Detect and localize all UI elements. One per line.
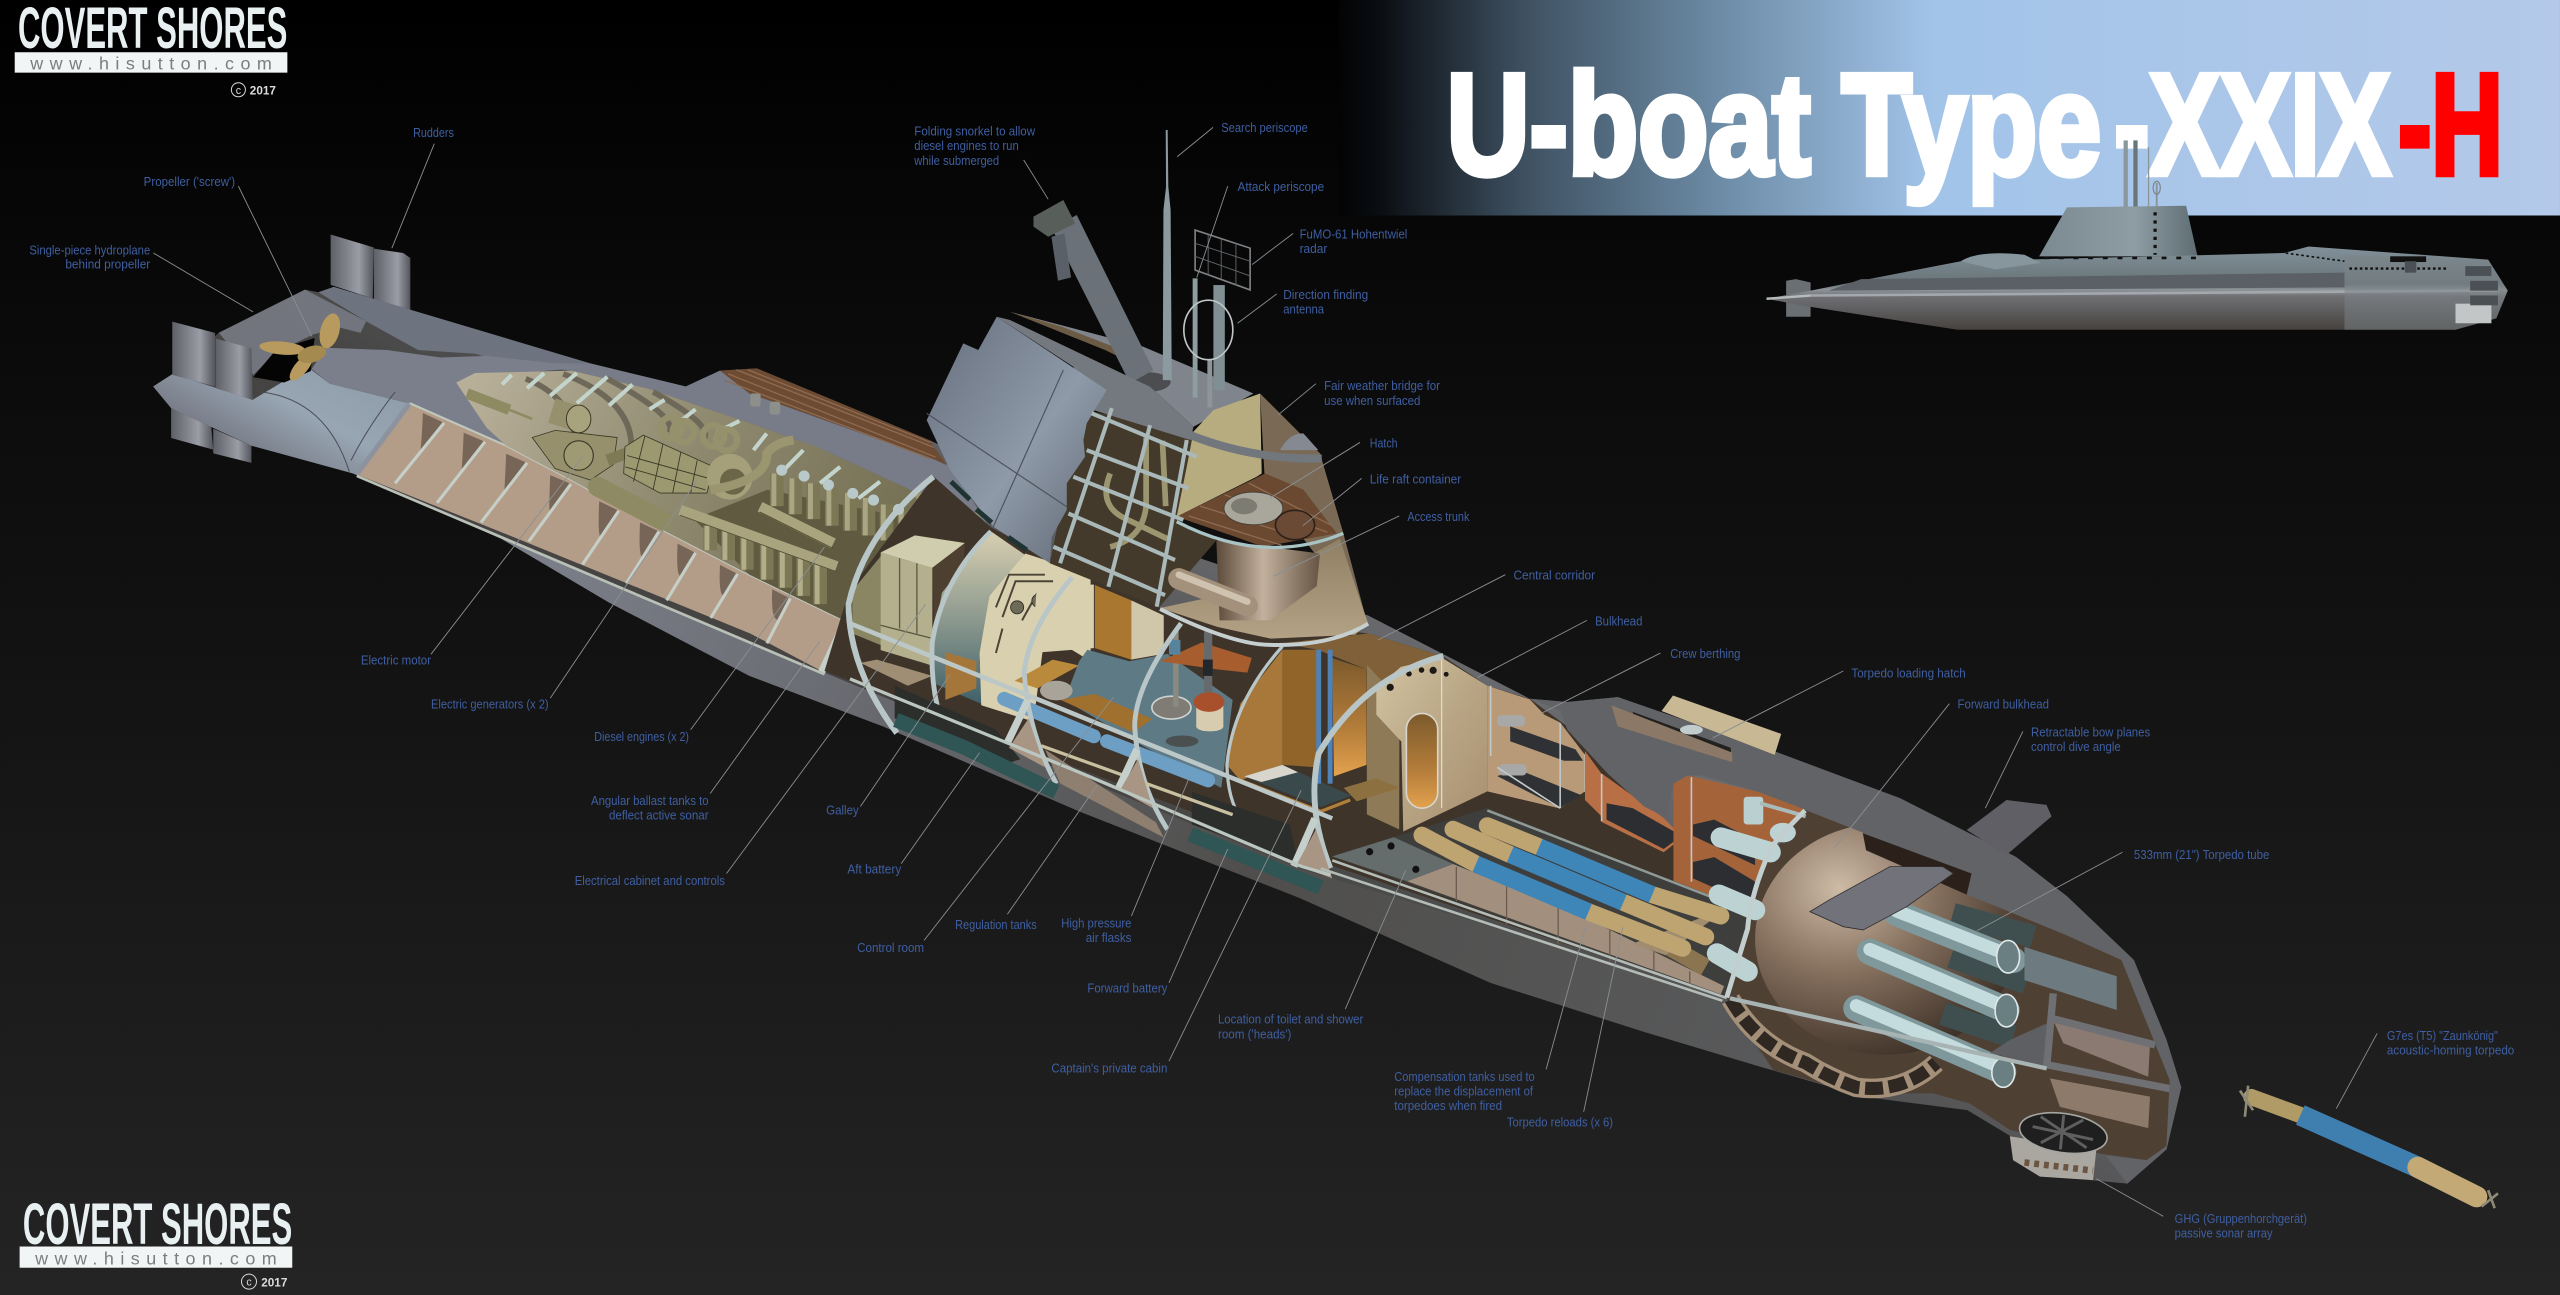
stern opening bbox=[253, 338, 315, 383]
label: regulation tanks bbox=[955, 785, 1097, 932]
electrical cabinet bbox=[860, 535, 965, 686]
label: electrical cabinet: Electrical cabinet and controls bbox=[575, 873, 725, 888]
hydroplane duct bbox=[219, 290, 366, 375]
label: galley: Galley bbox=[826, 803, 859, 818]
ladder frame bbox=[1053, 408, 1197, 607]
label: regulation tanks: Regulation tanks bbox=[955, 917, 1037, 932]
cabin door bbox=[1032, 584, 1164, 660]
rear deck planking bbox=[720, 368, 947, 465]
midship interior bbox=[824, 477, 1804, 998]
title bbox=[1447, 45, 2503, 205]
manifolds bbox=[680, 507, 837, 567]
label: snorkel: Folding snorkel to allow bbox=[914, 124, 1036, 139]
label: bulkhead: Bulkhead bbox=[1595, 613, 1642, 628]
logo bottom: c bbox=[246, 1277, 252, 1289]
search periscope bbox=[1203, 630, 1213, 695]
G7es torpedo bbox=[2240, 1086, 2498, 1208]
label: snorkel: while submerged bbox=[913, 153, 999, 168]
small motor bbox=[467, 393, 532, 419]
label: galley bbox=[826, 674, 950, 818]
manifold shadow bbox=[680, 512, 837, 572]
tube highlights bbox=[1856, 911, 2013, 1069]
label: central corridor: Central corridor bbox=[1513, 568, 1596, 583]
label: G7es torpedo: acoustic-homing torpedo bbox=[2387, 1043, 2514, 1058]
title: -XXIX bbox=[2114, 45, 2390, 205]
upper boom bbox=[318, 287, 590, 371]
far shell bbox=[1010, 312, 1153, 373]
sail well bbox=[1125, 372, 1171, 392]
label: central corridor bbox=[1378, 568, 1596, 640]
bridge band bbox=[1190, 435, 1322, 459]
label: crew berthing bbox=[1541, 646, 1740, 713]
right ribbed wall bbox=[1260, 393, 1367, 620]
label: retractable bow planes: control dive angle bbox=[2031, 739, 2121, 754]
label: rudders bbox=[392, 125, 454, 248]
lower hull band bbox=[349, 472, 1866, 1097]
valve balls bbox=[776, 465, 904, 515]
label: hydroplane: Single-piece hydroplane bbox=[29, 243, 150, 258]
deck bbox=[1177, 473, 1337, 547]
label: torpedo tube bbox=[1977, 847, 2269, 931]
valve bbox=[1744, 797, 1806, 842]
masts bbox=[1163, 130, 1250, 407]
rim bbox=[1177, 522, 1343, 547]
forward tubes bbox=[1856, 913, 2013, 1072]
lower trunk body bbox=[1160, 539, 1368, 639]
angled ballast tanks bbox=[357, 403, 845, 674]
label: angular ballast tanks: Angular ballast tanks to bbox=[591, 793, 709, 808]
label: search periscope: Search periscope bbox=[1221, 120, 1308, 135]
forward hoop bbox=[1727, 810, 1805, 998]
label: bulkhead bbox=[1478, 613, 1642, 678]
small side view submarine bbox=[1767, 140, 2508, 330]
label: electric generators: Electric generators (x 2) bbox=[431, 697, 549, 712]
forward berths bbox=[1585, 751, 1804, 914]
motor block bbox=[532, 430, 633, 480]
lower fins bbox=[171, 408, 251, 463]
engine room bbox=[456, 371, 989, 653]
label: torpedo tube: 533mm (21") Torpedo tube bbox=[2134, 847, 2269, 862]
label: fair weather bridge bbox=[1278, 378, 1441, 415]
hull bbox=[153, 287, 2181, 1184]
lower cylinder row bbox=[707, 526, 820, 604]
label: snorkel: diesel engines to run bbox=[914, 138, 1019, 153]
torpedo bay bbox=[1321, 808, 1771, 1001]
label: hydroplane bbox=[29, 243, 253, 312]
bow compartment and torpedo tubes bbox=[1717, 797, 2171, 1160]
control room floor bbox=[1064, 650, 1233, 788]
label: diesel engines: Diesel engines (x 2) bbox=[594, 729, 689, 744]
panel dark patches bbox=[951, 482, 1027, 550]
label: captain's cabin: Captain's private cabin bbox=[1051, 1061, 1167, 1076]
logo top: 2017 bbox=[250, 83, 276, 97]
label: torpedo reloads: Torpedo reloads (x 6) bbox=[1507, 1115, 1613, 1130]
crew berthing bbox=[1487, 686, 1585, 808]
label: electric motor bbox=[361, 457, 583, 667]
near rudders bbox=[172, 322, 253, 400]
air flasks bbox=[1004, 699, 1208, 780]
label: control room bbox=[857, 697, 1113, 955]
label: aft battery: Aft battery bbox=[847, 861, 902, 876]
aft tube stubs bbox=[1717, 838, 1771, 971]
label: propeller bbox=[144, 174, 312, 336]
label: rudders: Rudders bbox=[413, 125, 454, 140]
red drum bbox=[1193, 692, 1224, 731]
motor cylinder bbox=[552, 405, 591, 433]
sink bowl bbox=[1040, 681, 1073, 700]
bow cover recess bbox=[1863, 833, 1972, 895]
label: torpedo loading hatch bbox=[1713, 666, 1966, 738]
title banner bbox=[1339, 0, 2560, 216]
label: snorkel bbox=[913, 124, 1048, 199]
panel details bbox=[927, 370, 1067, 527]
logo top: www.hisutton.com bbox=[29, 53, 272, 73]
title: U-boat bbox=[1447, 45, 1811, 205]
label: hatch: Hatch bbox=[1370, 435, 1398, 450]
label: retractable bow planes bbox=[1985, 724, 2150, 808]
flywheel rings bbox=[660, 417, 737, 451]
bench bbox=[1060, 694, 1152, 732]
label: aft battery bbox=[847, 753, 980, 876]
label: life raft container bbox=[1303, 471, 1462, 526]
label: forward battery bbox=[1087, 849, 1228, 996]
label: electric motor: Electric motor bbox=[361, 652, 432, 667]
galley cupboard bbox=[945, 652, 976, 700]
cabin dome bbox=[1227, 633, 1443, 829]
label: high pressure air flasks: High pressure bbox=[1061, 915, 1131, 930]
air tank bbox=[1179, 575, 1247, 606]
retractable bow plane bbox=[1967, 800, 2052, 855]
title: Type bbox=[1842, 45, 2101, 205]
label: electrical cabinet bbox=[575, 604, 926, 888]
label: GHG sonar bbox=[2096, 1179, 2307, 1241]
label: search periscope bbox=[1177, 120, 1308, 157]
label: toilet and shower: room ('heads') bbox=[1218, 1026, 1291, 1041]
logo bottom: www.hisutton.com bbox=[34, 1248, 277, 1268]
label: fair weather bridge: Fair weather bridge for bbox=[1324, 378, 1441, 393]
diagonal beam bbox=[1730, 998, 2047, 1068]
label: compensation tanks: replace the displacement of bbox=[1394, 1083, 1533, 1098]
label: propeller: Propeller ('screw') bbox=[144, 174, 235, 189]
label: compensation tanks: Compensation tanks used to bbox=[1394, 1069, 1535, 1084]
label: toilet and shower: Location of toilet and shower bbox=[1218, 1012, 1364, 1027]
nose plates bbox=[2053, 1020, 2150, 1077]
far rudders bbox=[331, 234, 410, 312]
label: control room: Control room bbox=[857, 940, 924, 955]
main cutaway submarine bbox=[153, 130, 2181, 1184]
label: access trunk: Access trunk bbox=[1407, 509, 1470, 524]
lower torpedoes bbox=[1652, 937, 1705, 967]
lower deck beam bbox=[850, 679, 1331, 875]
logo top bbox=[15, 0, 287, 97]
label: forward bulkhead: Forward bulkhead bbox=[1958, 697, 2049, 712]
dome top bbox=[1143, 347, 1253, 427]
label: G7es torpedo: G7es (T5) "Zaunkönig" bbox=[2387, 1028, 2498, 1043]
mount bbox=[1169, 640, 1180, 655]
label: radar: FuMO-61 Hohentwiel bbox=[1300, 226, 1407, 241]
label: G7es torpedo bbox=[2336, 1028, 2514, 1109]
label: GHG sonar: passive sonar array bbox=[2175, 1226, 2273, 1241]
label: toilet and shower bbox=[1218, 870, 1406, 1041]
label: attack periscope: Attack periscope bbox=[1238, 179, 1324, 194]
back counter bbox=[1160, 642, 1252, 673]
logo top: c bbox=[236, 85, 242, 97]
grey side panel bbox=[927, 317, 1107, 563]
label: forward battery: Forward battery bbox=[1087, 981, 1168, 996]
label: electric generators bbox=[431, 480, 697, 712]
snorkel mast bbox=[1033, 200, 1153, 383]
bay rails bbox=[1321, 860, 1727, 1001]
label: radar: radar bbox=[1300, 241, 1328, 256]
torpedo loading hatch bbox=[1611, 695, 1781, 762]
sail upper band bbox=[997, 317, 1193, 440]
generator barrel bbox=[624, 435, 753, 500]
label: life raft container: Life raft container bbox=[1370, 471, 1462, 486]
propeller bbox=[259, 311, 344, 384]
tray bbox=[1633, 908, 1727, 955]
label: direction finding antenna: antenna bbox=[1283, 301, 1325, 316]
label: captain's cabin bbox=[1051, 790, 1301, 1076]
rear tube shadows bbox=[1943, 914, 2033, 1037]
label: diesel engines bbox=[594, 547, 824, 744]
label: direction finding antenna bbox=[1238, 287, 1368, 323]
upper cylinder row bbox=[774, 473, 904, 544]
keel battery band bbox=[895, 686, 1332, 887]
seat bbox=[1166, 735, 1198, 747]
sink unit bbox=[1015, 660, 1079, 688]
midbody upper hull bbox=[490, 362, 989, 527]
passage room bbox=[932, 531, 1025, 705]
label: fair weather bridge: use when surfaced bbox=[1324, 393, 1420, 408]
label: radar bbox=[1252, 226, 1407, 264]
label: high pressure air flasks: air flasks bbox=[1086, 930, 1131, 945]
pressure hull hoops bbox=[848, 477, 1443, 868]
label: angular ballast tanks bbox=[591, 642, 820, 823]
title: -H bbox=[2398, 45, 2503, 205]
stern lower boom bbox=[153, 369, 410, 474]
label: hydroplane: behind propeller bbox=[65, 257, 151, 272]
label: hatch bbox=[1270, 435, 1398, 498]
central hub section bbox=[312, 348, 590, 446]
logo bottom bbox=[20, 1192, 292, 1290]
label: retractable bow planes: Retractable bow planes bbox=[2031, 724, 2150, 739]
sonar array bbox=[2010, 1108, 2110, 1180]
lattice keel ring bbox=[1731, 999, 1936, 1088]
exhaust pipes bbox=[710, 440, 980, 520]
galley wall bbox=[980, 553, 1091, 722]
label: angular ballast tanks: deflect active sonar bbox=[609, 808, 709, 823]
recess pipes bbox=[1106, 438, 1167, 547]
label: attack periscope bbox=[1197, 179, 1324, 278]
bow plane bbox=[1810, 867, 1953, 930]
lower rim bbox=[1160, 609, 1368, 645]
bridge interior bbox=[1177, 393, 1262, 517]
dome bbox=[1755, 823, 2016, 1055]
label: high pressure air flasks bbox=[1061, 775, 1190, 945]
attack periscope well bbox=[1152, 630, 1191, 719]
torpedo reloads bbox=[1422, 826, 1721, 948]
label: torpedo reloads bbox=[1507, 927, 1623, 1130]
label: access trunk bbox=[1273, 509, 1470, 576]
engine room tail behind first hoop bbox=[852, 555, 932, 666]
label: forward bulkhead bbox=[1835, 697, 2049, 847]
upper hull cover forward bbox=[1530, 697, 2181, 1184]
cream bulkhead bbox=[1376, 657, 1487, 831]
label: GHG sonar: GHG (Gruppenhorchgerät) bbox=[2175, 1211, 2307, 1226]
label: compensation tanks bbox=[1394, 927, 1585, 1113]
fin sail and bridge bbox=[927, 130, 1368, 645]
access trunk bbox=[1216, 540, 1320, 620]
logo bottom: 2017 bbox=[261, 1276, 288, 1290]
label: crew berthing: Crew berthing bbox=[1670, 646, 1740, 661]
ladder recess bbox=[1050, 411, 1216, 607]
longitudinal beams bbox=[850, 623, 1332, 818]
label: direction finding antenna: Direction finding bbox=[1283, 287, 1368, 302]
label: torpedo loading hatch: Torpedo loading hatch bbox=[1851, 666, 1966, 681]
label: compensation tanks: torpedoes when fired bbox=[1394, 1098, 1502, 1113]
bump bbox=[1280, 433, 1318, 450]
lower generator bbox=[598, 487, 663, 521]
logo bottom: COVERT SHORES bbox=[23, 1192, 292, 1257]
